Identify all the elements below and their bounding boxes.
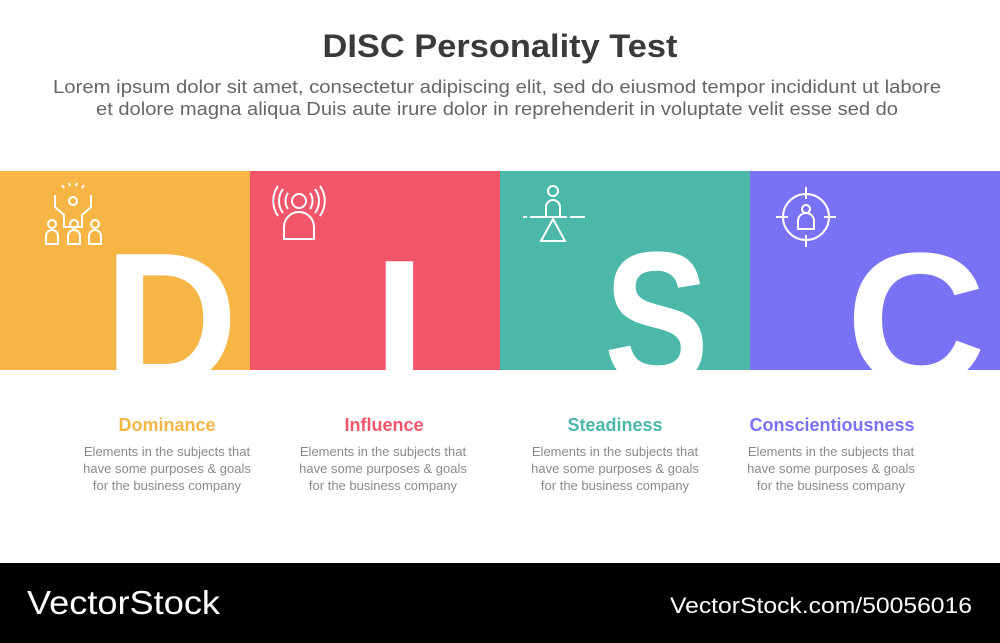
item: Conscientiousness: Conscientiousness — [749, 415, 915, 435]
subtitle — [53, 77, 941, 119]
icon: crowd — [46, 183, 101, 244]
item: Conscientiousness: for the business company — [757, 478, 906, 493]
item: Steadiness — [531, 415, 699, 493]
item: Steadiness: for the business company — [541, 478, 690, 493]
item: Influence: Influence — [344, 415, 424, 435]
footer: VectorStock — [27, 584, 221, 621]
big letters: S — [604, 213, 709, 425]
icon: balance person — [523, 186, 585, 241]
big letters — [116, 251, 981, 370]
subtitle: Lorem ipsum dolor sit amet, consectetur adipiscing elit, sed do eiusmod tempor incididunt ut labore — [53, 77, 941, 97]
panel: C — [750, 171, 1000, 370]
panel: D — [0, 171, 250, 370]
item: Dominance: Elements in the subjects that — [84, 444, 250, 459]
item: Dominance: have some purposes & goals — [83, 461, 251, 476]
item: Dominance — [83, 415, 251, 493]
item: Conscientiousness: have some purposes & goals — [747, 461, 915, 476]
item: Influence: for the business company — [309, 478, 458, 493]
footer — [0, 563, 1000, 643]
item: Dominance: Dominance — [118, 415, 216, 435]
icon: broadcasting person — [273, 186, 325, 239]
item: Conscientiousness — [747, 415, 915, 493]
item: Influence — [299, 415, 467, 493]
footer: VectorStock.com/50056016 — [670, 593, 972, 618]
item: Steadiness: have some purposes & goals — [531, 461, 699, 476]
item: Conscientiousness: Elements in the subjects that — [748, 444, 914, 459]
item: Dominance: for the business company — [93, 478, 242, 493]
big letters: D — [104, 214, 238, 426]
icon: target person — [776, 187, 836, 247]
panel: I — [250, 171, 500, 370]
subtitle: et dolore magna aliqua Duis aute irure dolor in reprehenderit in voluptate velit esse sed do — [96, 99, 898, 119]
item: Steadiness: Elements in the subjects that — [532, 444, 698, 459]
item: Steadiness: Steadiness — [567, 415, 663, 435]
big letters: C — [846, 214, 986, 426]
title: DISC Personality Test — [322, 28, 678, 64]
big letters: I — [373, 221, 426, 433]
item: Influence: have some purposes & goals — [299, 461, 467, 476]
panel: S — [500, 171, 750, 370]
item: Influence: Elements in the subjects that — [300, 444, 466, 459]
